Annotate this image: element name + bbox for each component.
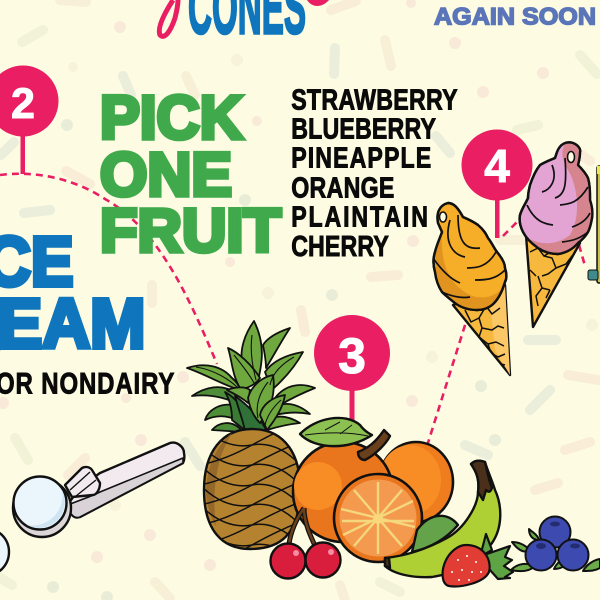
step 3 marker xyxy=(314,315,390,425)
heading: pick one fruit xyxy=(100,84,281,264)
icon: orange slice xyxy=(334,474,422,562)
fruit list xyxy=(291,83,458,263)
heading: pick one fruit: ONE xyxy=(100,140,232,208)
icon: oranges xyxy=(293,442,453,542)
icon: pineapple xyxy=(186,320,316,550)
icon: blueberries xyxy=(511,516,600,571)
step 3 marker: 3 xyxy=(338,328,366,384)
step 2 marker: 2 xyxy=(11,80,35,128)
step 4 marker xyxy=(462,130,532,238)
fruit list: STRAWBERRY xyxy=(291,83,458,116)
icon: banana xyxy=(385,461,500,577)
heading: pick one fruit: FRUIT xyxy=(100,196,281,264)
icon: orange stem and leaf xyxy=(300,418,390,460)
top right tagline: AGAIN SOON xyxy=(434,3,596,30)
fruit list: PINEAPPLE xyxy=(291,141,431,174)
icon: cherries xyxy=(270,508,340,578)
top brand: script mark and CONES xyxy=(159,0,329,50)
heading: pick one fruit: PICK xyxy=(100,84,243,152)
subheading: or nondairy: OR NONDAIRY xyxy=(0,366,174,400)
dashed route xyxy=(0,174,585,446)
fruit list: PLAINTAIN xyxy=(291,200,428,233)
fruit list: ORANGE xyxy=(291,171,394,204)
fruit list: CHERRY xyxy=(291,229,389,263)
icon: pink ice cream cone xyxy=(520,142,592,327)
step 2 marker xyxy=(0,66,58,174)
icon: strawberry xyxy=(443,534,513,586)
icon: ice cream scoop xyxy=(0,443,184,576)
icon: orange ice cream cone xyxy=(433,203,510,375)
heading: ice cream xyxy=(0,222,146,362)
step 4 marker: 4 xyxy=(484,140,510,192)
fruit list: BLUEBERRY xyxy=(291,112,436,145)
next step illustration edge xyxy=(588,166,600,283)
